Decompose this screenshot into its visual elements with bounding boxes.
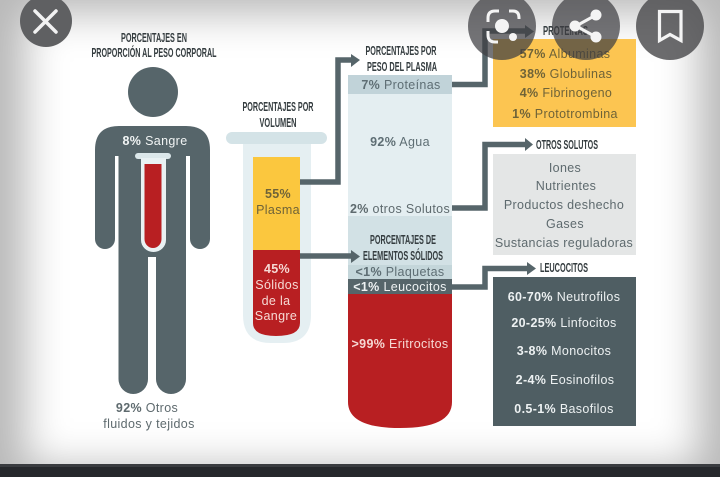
heading: other solutes: OTROS SOLUTOS [536, 137, 598, 152]
label: 8% blood: 8% Sangre [122, 134, 188, 148]
label: 55% plasma: Plasma [256, 203, 300, 217]
panel: leukocytes: 20-25% Linfocitos [511, 316, 617, 330]
heading: percentages by body weight: PORCENTAJES EN [121, 30, 187, 45]
panel: leukocytes: 3-8% Monocitos [517, 344, 611, 358]
panel: other solutes [493, 137, 636, 255]
label: 2% other solutes: 2% otros Solutos [350, 202, 450, 216]
panel: proteins: 57% Albuminas [520, 47, 610, 61]
icon: close button [20, 0, 72, 47]
heading: percentages by body weight: PROPORCIÓN AL PESO CORPORAL [92, 45, 217, 60]
label: 55% plasma: 55% [265, 187, 291, 201]
heading: percentages by plasma weight: PESO DEL PLASMA [367, 59, 437, 74]
panel: other solutes: Iones [549, 161, 581, 175]
panel: other solutes: Gases [546, 217, 584, 231]
arrow: other solutes [452, 138, 533, 208]
label: 92% other fluids and tissues [103, 401, 195, 431]
heading: percentages by volume [242, 99, 314, 130]
panel: other solutes: Sustancias reguladoras [495, 236, 633, 250]
label: 55% plasma [256, 187, 300, 217]
heading: percentages by volume: PORCENTAJES POR [242, 99, 314, 114]
label: 45% blood solids [255, 262, 299, 323]
large test tube breakdown [348, 75, 452, 428]
panel: proteins: 1% Prototrombina [512, 107, 618, 121]
arrow: plasma to plasma weight [300, 54, 360, 182]
label: leukocytes: <1% Leucocitos [353, 280, 447, 294]
heading: percentages of solid elements: PORCENTAJES DE [370, 232, 436, 247]
icon: share button [552, 0, 620, 60]
heading: proteins: PROTEÍNAS [543, 23, 588, 38]
heading: leukocytes: LEUCOCITOS [540, 260, 588, 275]
icon: bookmark button [636, 0, 704, 60]
label: 45% blood solids: 45% [264, 262, 290, 276]
heading: percentages by body weight [92, 30, 217, 60]
heading: percentages of solid elements [363, 232, 443, 263]
panel: proteins [493, 23, 636, 127]
label: 92% other fluids and tissues: 92% Otros [116, 401, 178, 415]
label: 92% other fluids and tissues: fluidos y tejidos [103, 417, 195, 431]
heading: percentages by plasma weight: PORCENTAJES POR [366, 43, 437, 58]
arrow: blood solids to solid elements [300, 250, 360, 263]
label: 45% blood solids: de la [262, 294, 290, 308]
label: 45% blood solids: Sólidos [255, 278, 299, 292]
panel: leukocytes: 60-70% Neutrofilos [508, 290, 620, 304]
icon: lens button [468, 0, 536, 60]
heading: percentages of solid elements: ELEMENTOS SÓLIDOS [363, 248, 443, 263]
label: platelets: <1% Plaquetas [356, 265, 444, 279]
icon: human figure with blood tube [95, 67, 210, 394]
panel: leukocytes: 2-4% Eosinofilos [516, 373, 614, 387]
bottom bar [0, 464, 720, 477]
label: 45% blood solids: Sangre [255, 309, 297, 323]
label: erythrocytes: >99% Eritrocitos [352, 337, 448, 351]
panel: proteins: 4% Fibrinogeno [520, 86, 612, 100]
label: 7% proteins: 7% Proteínas [361, 78, 441, 92]
label: 92% water: 92% Agua [370, 135, 430, 149]
panel: leukocytes: 0.5-1% Basofilos [514, 402, 614, 416]
heading: percentages by plasma weight [366, 43, 437, 74]
arrow: leukocytes [452, 262, 536, 287]
panel: leukocytes [493, 260, 636, 426]
panel: proteins: 38% Globulinas [520, 67, 612, 81]
panel: other solutes: Nutrientes [536, 179, 596, 193]
heading: percentages by volume: VOLUMEN [260, 115, 296, 130]
panel: other solutes: Productos deshecho [504, 198, 624, 212]
test tube by volume [226, 132, 327, 343]
arrow: proteins [452, 25, 534, 84]
